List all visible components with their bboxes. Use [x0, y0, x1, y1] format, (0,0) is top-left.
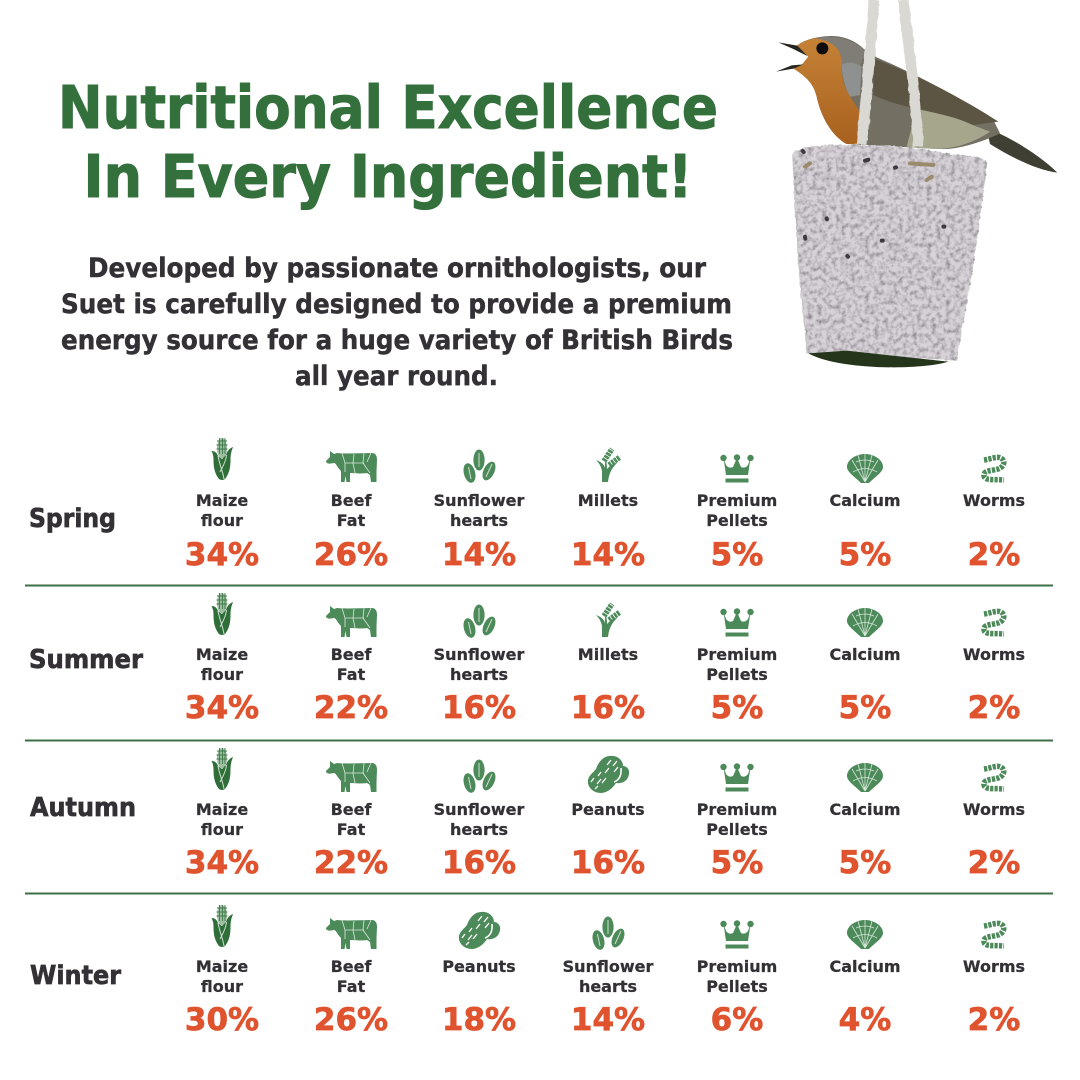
item: maize flour: 34% [185, 537, 259, 573]
item: peanuts: Peanuts [442, 957, 516, 976]
item: premium pellets: 6% [711, 1002, 763, 1038]
item: beef fat: Fat [337, 820, 366, 839]
suet crumbs and specks [803, 151, 944, 257]
divider: summer/autumn [25, 740, 1053, 742]
item: maize flour [185, 748, 259, 881]
item: sunflower hearts [434, 450, 524, 573]
intro text block: Developed by passionate ornithologists, our [88, 253, 707, 284]
item: sunflower hearts [434, 604, 524, 726]
item: sunflower hearts: Sunflower [434, 800, 524, 819]
item: maize flour: flour [201, 977, 243, 996]
item: premium pellets: Premium [697, 491, 777, 510]
item: calcium: 5% [839, 690, 891, 726]
item: premium pellets: Premium [697, 957, 777, 976]
item: calcium: Calcium [829, 957, 901, 976]
bird belly [907, 108, 990, 149]
item: beef fat: Beef [331, 957, 372, 976]
season label: autumn: Autumn [30, 793, 136, 823]
item: beef fat [314, 606, 388, 726]
item: beef fat: 26% [314, 537, 388, 573]
item: sunflower hearts: 14% [442, 537, 516, 573]
item: calcium: 5% [839, 845, 891, 881]
item: worms [963, 766, 1025, 881]
item: sunflower hearts: Sunflower [434, 645, 524, 664]
item: premium pellets: 5% [711, 845, 763, 881]
bird beak [776, 42, 807, 72]
row: summer [29, 593, 1025, 726]
item: millets: 14% [571, 537, 645, 573]
bird orange breast [793, 38, 862, 144]
intro text block [61, 253, 733, 392]
bird wing [873, 58, 998, 125]
item: sunflower hearts: hearts [450, 820, 508, 839]
item: beef fat: Beef [331, 491, 372, 510]
item: worms [963, 923, 1025, 1038]
item: peanuts: Peanuts [571, 800, 645, 819]
item: premium pellets: 5% [711, 690, 763, 726]
item: sunflower hearts [563, 916, 653, 1038]
item: beef fat: Fat [337, 977, 366, 996]
item: worms: 2% [968, 845, 1020, 881]
title [58, 73, 718, 211]
season label: winter: Winter [30, 961, 121, 991]
item: maize flour: 34% [185, 690, 259, 726]
item: premium pellets: Premium [697, 800, 777, 819]
item: millets [571, 604, 645, 726]
item: calcium: 5% [839, 537, 891, 573]
item: premium pellets: Pellets [706, 665, 768, 684]
item: beef fat [314, 451, 388, 573]
item: maize flour: flour [201, 665, 243, 684]
item: beef fat: 26% [314, 1002, 388, 1038]
item: maize flour: flour [201, 820, 243, 839]
item: millets: Millets [578, 491, 638, 510]
item: sunflower hearts: hearts [450, 665, 508, 684]
item: peanuts [442, 912, 516, 1038]
item: peanuts [571, 756, 645, 881]
item: peanuts: 18% [442, 1002, 516, 1038]
intro text block: Suet is carefully designed to provide a premium [61, 289, 732, 320]
item: sunflower hearts: Sunflower [434, 491, 524, 510]
row: spring [29, 438, 1025, 573]
item: maize flour: 34% [185, 845, 259, 881]
item: beef fat [314, 918, 388, 1038]
item: beef fat: Beef [331, 645, 372, 664]
bird head crown [815, 37, 865, 67]
item: beef fat: 22% [314, 845, 388, 881]
item: sunflower hearts: 14% [571, 1002, 645, 1038]
season label: spring: Spring [29, 504, 116, 534]
item: sunflower hearts: hearts [579, 977, 637, 996]
item: worms: 2% [968, 1002, 1020, 1038]
item: beef fat: Fat [337, 665, 366, 684]
item: premium pellets: Pellets [706, 511, 768, 530]
row: autumn [30, 748, 1025, 881]
item: maize flour [185, 593, 259, 726]
item: premium pellets [697, 920, 777, 1038]
item: worms: Worms [963, 645, 1025, 664]
row: winter [30, 905, 1025, 1038]
item: sunflower hearts: 16% [442, 845, 516, 881]
item: beef fat: Fat [337, 511, 366, 530]
item: calcium [829, 454, 901, 573]
hanging ropes [862, 0, 918, 147]
divider: autumn/winter [25, 892, 1053, 894]
item: maize flour [185, 438, 259, 573]
item: worms: 2% [968, 537, 1020, 573]
item: millets: Millets [578, 645, 638, 664]
item: maize flour: 30% [185, 1002, 259, 1038]
item: worms [963, 611, 1025, 726]
pot base shadow [808, 351, 948, 367]
item: calcium [829, 763, 901, 881]
item: worms: Worms [963, 491, 1025, 510]
item: millets [571, 449, 645, 573]
title: In Every Ingredient! [84, 142, 692, 211]
item: premium pellets: Pellets [706, 977, 768, 996]
divider: spring/summer [25, 584, 1053, 586]
item: beef fat [314, 761, 388, 881]
item: premium pellets [697, 608, 777, 726]
item: maize flour: Maize [196, 491, 248, 510]
item: maize flour [185, 905, 259, 1038]
item: calcium: 4% [839, 1002, 891, 1038]
item: maize flour: Maize [196, 957, 248, 976]
title: Nutritional Excellence [58, 73, 718, 142]
bird body [793, 36, 1000, 149]
suet pot [792, 145, 987, 361]
item: beef fat: 22% [314, 690, 388, 726]
photo: robin perched on hanging suet pot [776, 0, 1057, 367]
item: worms [963, 457, 1025, 573]
item: beef fat: Beef [331, 800, 372, 819]
item: maize flour: Maize [196, 645, 248, 664]
item: peanuts: 16% [571, 845, 645, 881]
item: calcium: Calcium [829, 645, 901, 664]
item: premium pellets: Pellets [706, 820, 768, 839]
item: premium pellets: Premium [697, 645, 777, 664]
item: calcium [829, 920, 901, 1038]
bird cheek [842, 62, 862, 97]
item: premium pellets [697, 763, 777, 881]
item: calcium: Calcium [829, 800, 901, 819]
item: premium pellets [697, 454, 777, 573]
item: maize flour: flour [201, 511, 243, 530]
bird eye [816, 42, 828, 54]
intro text block: energy source for a huge variety of British Birds [61, 325, 733, 356]
item: calcium [829, 608, 901, 726]
bird tail [987, 128, 1057, 173]
item: sunflower hearts: 16% [442, 690, 516, 726]
item: worms: Worms [963, 800, 1025, 819]
item: sunflower hearts [434, 760, 524, 881]
item: sunflower hearts: hearts [450, 511, 508, 530]
item: calcium: Calcium [829, 491, 901, 510]
item: maize flour: Maize [196, 800, 248, 819]
item: millets: 16% [571, 690, 645, 726]
item: worms: 2% [968, 690, 1020, 726]
intro text block: all year round. [295, 361, 498, 392]
item: worms: Worms [963, 957, 1025, 976]
season label: summer: Summer [29, 645, 143, 675]
item: sunflower hearts: Sunflower [563, 957, 653, 976]
item: premium pellets: 5% [711, 537, 763, 573]
